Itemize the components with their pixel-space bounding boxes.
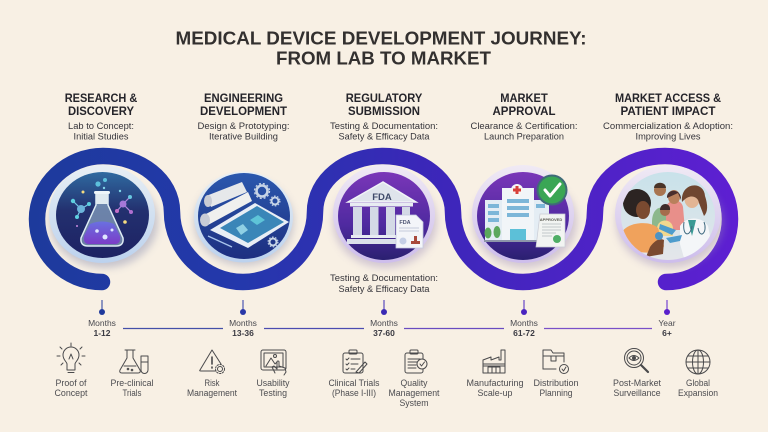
stage heading: regulatory submission: REGULATORY xyxy=(346,91,422,105)
title xyxy=(176,28,586,68)
label: usability testing xyxy=(256,378,290,398)
stage heading: market access and patient impact: Commercialization & Adoption: xyxy=(603,121,733,131)
icon: FDA building badge: FDA xyxy=(372,192,392,203)
label: usability testing: Testing xyxy=(259,388,287,398)
label: pre-clinical trials: Trials xyxy=(122,388,142,398)
icon: magnifier with eye xyxy=(624,348,648,372)
label: proof of concept: Concept xyxy=(54,388,88,398)
label: pre-clinical trials: Pre-clinical xyxy=(110,378,154,388)
icon: patient care badge xyxy=(615,165,724,268)
label: distribution planning xyxy=(534,378,578,398)
icon: approved hospital badge: APPROVED xyxy=(540,217,562,222)
timeline marker: months 13-36 xyxy=(229,300,257,338)
label: risk management: Management xyxy=(187,388,237,398)
label: proof of concept xyxy=(54,378,88,398)
icon: usability screen with hand xyxy=(261,350,286,375)
stage heading: market access and patient impact xyxy=(603,91,733,142)
label: clinical trials xyxy=(328,378,380,398)
callout: testing and documentation xyxy=(330,273,438,294)
stage heading: engineering development: ENGINEERING xyxy=(204,91,283,105)
label: proof of concept: Proof of xyxy=(56,378,87,388)
stage heading: market approval: Launch Preparation xyxy=(484,132,564,142)
icon: factory xyxy=(483,350,505,373)
label: risk management: Risk xyxy=(204,378,220,388)
icon: flask badge xyxy=(49,165,158,268)
label: manufacturing scale-up: Manufacturing xyxy=(466,378,524,388)
label: distribution planning: Planning xyxy=(540,388,572,398)
timeline marker: months 37-60: 37-60 xyxy=(373,328,395,338)
serpentine ribbon path xyxy=(37,156,730,282)
icon: flask and test tube xyxy=(120,350,148,374)
label: quality management system: Management xyxy=(388,388,440,398)
icon: distribution folder xyxy=(543,350,568,374)
stage heading: research and discovery: Initial Studies xyxy=(74,132,129,142)
timeline marker: months 37-60: Months xyxy=(370,318,398,328)
label: quality management system xyxy=(388,378,440,408)
timeline marker: months 1-12 xyxy=(88,300,116,338)
label: global expansion xyxy=(678,378,718,398)
stage heading: research and discovery: RESEARCH & xyxy=(65,91,138,105)
timeline marker: months 61-72: Months xyxy=(510,318,538,328)
timeline marker: year 6+: 6+ xyxy=(662,328,672,338)
label: global expansion: Global xyxy=(686,378,710,388)
label: clinical trials: Clinical Trials xyxy=(328,378,380,388)
icon: FDA building badge: FDA xyxy=(399,220,411,226)
icon: globe xyxy=(686,350,710,374)
timeline marker: months 37-60 xyxy=(370,300,398,338)
stage heading: market approval xyxy=(470,91,578,142)
stage heading: engineering development xyxy=(198,91,290,142)
stage heading: research and discovery: DISCOVERY xyxy=(68,104,134,118)
timeline marker: year 6+ xyxy=(658,300,676,338)
label: distribution planning: Distribution xyxy=(534,378,578,388)
callout: testing and documentation: Safety & Efficacy Data xyxy=(338,284,430,294)
icon: FDA building badge xyxy=(333,165,437,268)
stage heading: regulatory submission: Safety & Efficacy Data xyxy=(338,132,430,142)
label: global expansion: Expansion xyxy=(678,388,718,398)
stage heading: engineering development: DEVELOPMENT xyxy=(200,104,288,118)
stage heading: market access and patient impact: PATIENT IMPACT xyxy=(620,104,716,118)
stage heading: regulatory submission xyxy=(330,91,438,142)
icon: warning triangle with gear xyxy=(200,350,224,374)
callout: testing and documentation: Testing & Documentation: xyxy=(330,273,438,283)
label: post-market surveillance: Surveillance xyxy=(614,388,660,398)
timeline marker: months 13-36: 13-36 xyxy=(232,328,254,338)
label: pre-clinical trials xyxy=(110,378,154,398)
timeline marker: year 6+: Year xyxy=(658,318,676,328)
label: manufacturing scale-up xyxy=(466,378,524,398)
timeline marker: months 1-12: Months xyxy=(88,318,116,328)
stage heading: market approval: MARKET xyxy=(500,91,548,105)
stage heading: regulatory submission: Testing & Documentation: xyxy=(330,121,438,131)
label: quality management system: Quality xyxy=(400,378,428,388)
title: MEDICAL DEVICE DEVELOPMENT JOURNEY: xyxy=(176,28,586,48)
icon: clipboard checklist xyxy=(343,350,367,373)
stage heading: regulatory submission: SUBMISSION xyxy=(348,104,420,118)
stage heading: market access and patient impact: Improving Lives xyxy=(636,132,701,142)
label: manufacturing scale-up: Scale-up xyxy=(478,388,512,398)
stage heading: research and discovery: Lab to Concept: xyxy=(68,121,134,131)
icon: quality clipboard xyxy=(405,350,427,373)
stage heading: market approval: APPROVAL xyxy=(492,104,556,118)
label: post-market surveillance: Post-Market xyxy=(613,378,661,388)
timeline marker: months 61-72 xyxy=(510,300,538,338)
label: usability testing: Usability xyxy=(256,378,290,388)
timeline marker: months 13-36: Months xyxy=(229,318,257,328)
title: FROM LAB TO MARKET xyxy=(276,48,491,68)
stage heading: market access and patient impact: MARKET ACCESS & xyxy=(615,91,721,105)
icon: light bulb xyxy=(57,343,85,372)
label: clinical trials: (Phase I-III) xyxy=(332,388,376,398)
label: risk management xyxy=(187,378,237,398)
stage heading: engineering development: Iterative Building xyxy=(209,132,278,142)
label: quality management system: System xyxy=(400,398,428,408)
icon: approved hospital badge xyxy=(472,165,577,268)
timeline marker: months 1-12: 1-12 xyxy=(93,328,111,338)
stage heading: engineering development: Design & Prototyping: xyxy=(198,121,290,131)
timeline connector lines xyxy=(123,328,652,330)
icon: engineering blueprint badge xyxy=(194,172,294,266)
label: post-market surveillance xyxy=(613,378,661,398)
timeline marker: months 61-72: 61-72 xyxy=(513,328,535,338)
stage heading: research and discovery xyxy=(65,91,138,142)
stage heading: market approval: Clearance & Certification: xyxy=(470,121,578,131)
